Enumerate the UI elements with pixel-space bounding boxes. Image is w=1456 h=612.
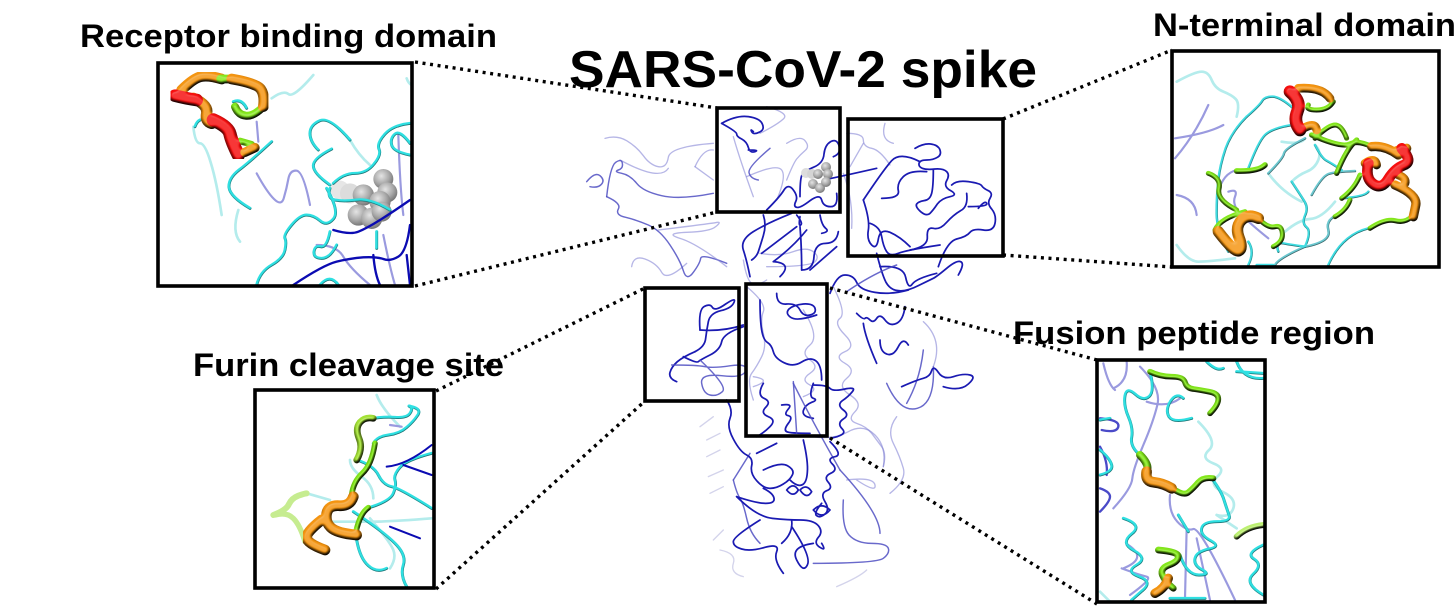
panel: receptor binding domain inset	[158, 63, 412, 286]
spike upper region: S1 head and NTD chains	[587, 107, 995, 293]
selection box: furin cleavage site	[645, 288, 739, 401]
selection box: fusion peptide region	[746, 284, 827, 436]
title: SARS-CoV-2 spike	[569, 41, 1037, 99]
heading: receptor binding domain: Receptor binding domain	[80, 18, 497, 54]
dotted connector: furin cleavage site	[436, 288, 645, 589]
dotted connector: N-terminal domain	[1003, 50, 1172, 267]
grey ligand spheres	[331, 169, 397, 229]
panel: N-terminal domain inset	[1172, 51, 1439, 267]
spike lower region: S2 stalk chains	[670, 287, 973, 587]
heading: fusion peptide region: Fusion peptide region	[1013, 315, 1375, 351]
panel: fusion peptide region inset	[1097, 360, 1265, 602]
dotted connector: fusion peptide region	[830, 288, 1097, 604]
heading: furin cleavage site: Furin cleavage site	[193, 347, 504, 383]
grey ligand spheres in spike	[801, 162, 833, 193]
selection box: receptor binding domain	[717, 108, 840, 212]
panel: furin cleavage site inset	[255, 390, 434, 588]
heading: N-terminal domain: N-terminal domain	[1153, 7, 1456, 43]
selection box: N-terminal domain	[848, 119, 1003, 256]
spike protein structure	[587, 107, 995, 587]
dotted connector: receptor binding domain	[415, 62, 717, 286]
